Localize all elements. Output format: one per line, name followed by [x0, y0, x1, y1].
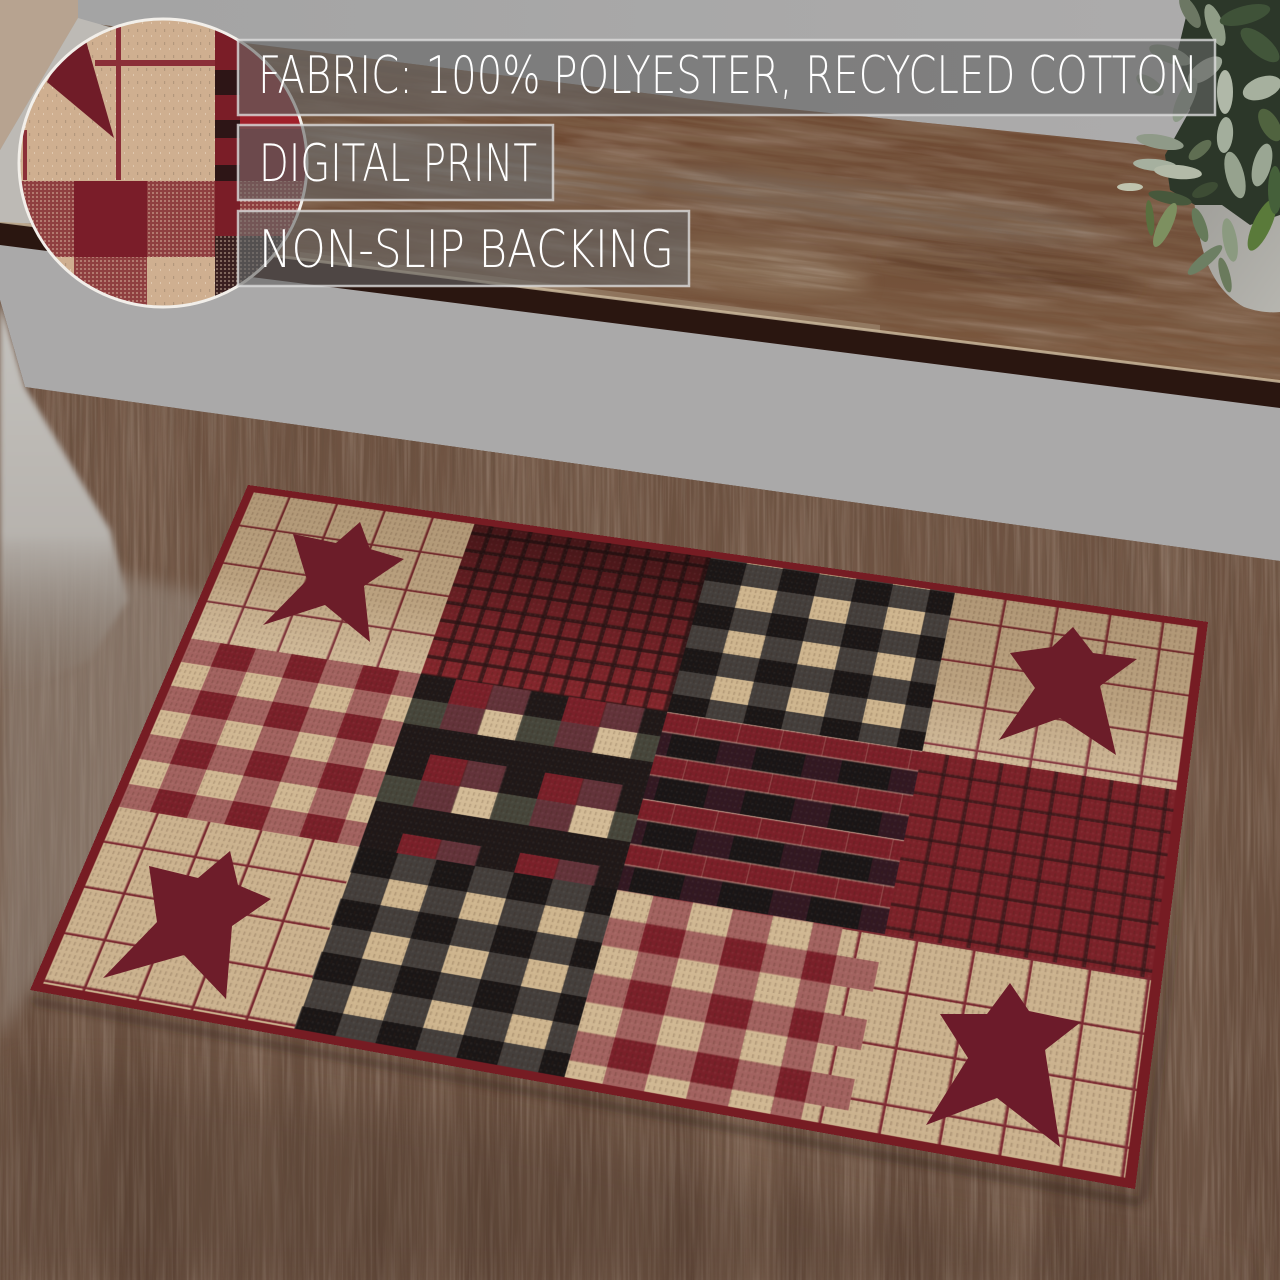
star bottom right	[926, 983, 1081, 1147]
panel: black gingham bottom	[291, 847, 617, 1086]
left side wood post	[0, 0, 78, 150]
rug border	[37, 489, 1203, 1183]
magnified fabric detail circle	[18, 18, 308, 308]
shelf front shadow	[0, 222, 1280, 408]
panel: striped flag	[617, 712, 922, 934]
wall and white step riser	[0, 0, 1280, 565]
wooden shelf top	[0, 24, 1280, 382]
panel: star bottom right	[799, 927, 1162, 1189]
panel: star top left	[182, 485, 477, 674]
panel: black and red check	[359, 674, 667, 890]
panel: star top right	[922, 586, 1208, 792]
panel: red gingham bottom with stepped edge	[562, 890, 885, 1136]
callout: digital print	[238, 125, 553, 200]
woven texture	[30, 485, 1208, 1189]
callout: non-slip backing	[238, 211, 689, 286]
star panel shading	[182, 485, 1208, 792]
rug backing	[30, 485, 1208, 1189]
star top right	[999, 627, 1137, 755]
left step corner	[0, 18, 120, 225]
rug cast shadow	[30, 628, 1214, 1206]
star bottom left	[103, 851, 271, 999]
panel: dark red plaid top	[421, 518, 713, 712]
light edge of shelf	[0, 220, 1280, 383]
callout: digital print: DIGITAL PRINT	[259, 134, 537, 194]
rug with patchwork panels	[30, 485, 1208, 1189]
panel: black gingham top	[667, 551, 956, 751]
star top left	[263, 522, 404, 642]
panel: dark red plaid right	[885, 751, 1186, 980]
plant pot	[1193, 190, 1280, 312]
plant foliage	[1117, 0, 1280, 294]
panel: star bottom left	[30, 805, 359, 1037]
callout: non-slip backing: NON-SLIP BACKING	[259, 220, 674, 280]
floor boards	[0, 300, 1280, 1280]
panel: red gingham left	[110, 637, 421, 847]
